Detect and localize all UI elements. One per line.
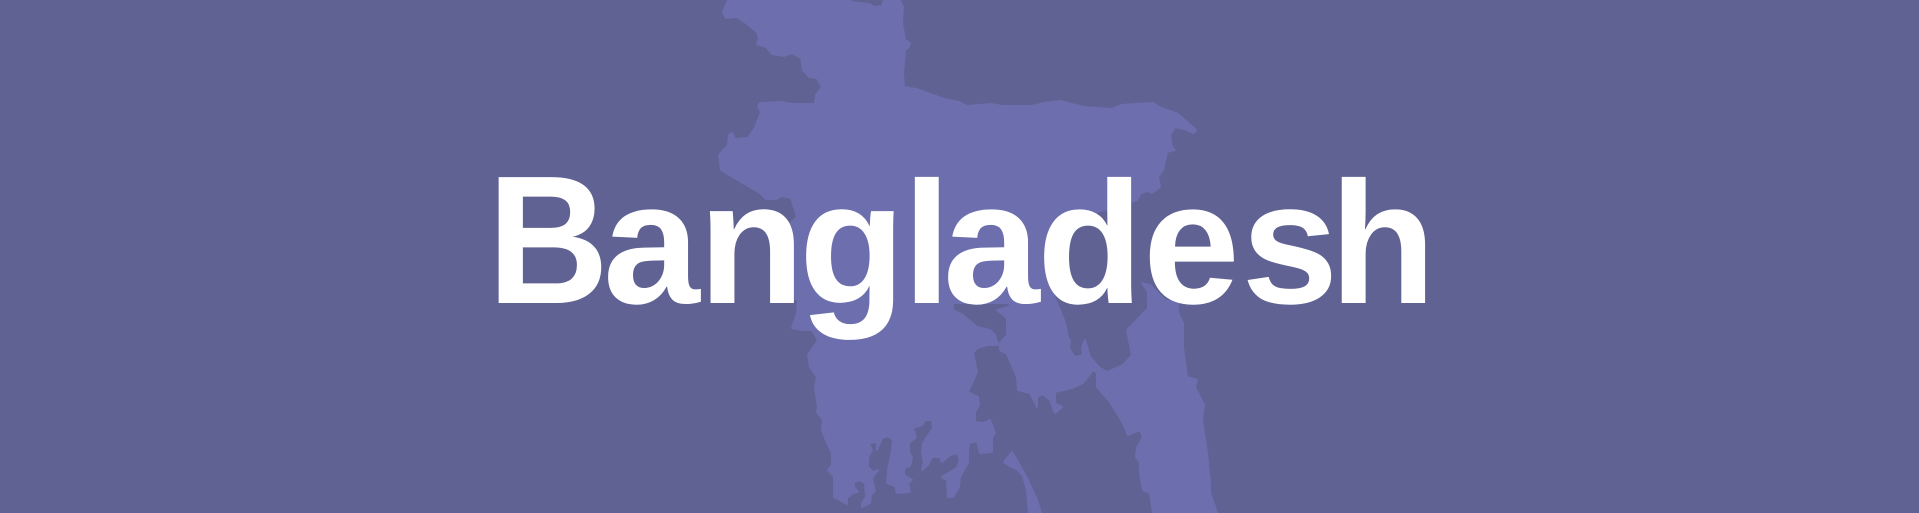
map silhouette of Bangladesh [719, 0, 1217, 513]
title: B [487, 137, 609, 342]
title: angladesh [603, 145, 1436, 340]
